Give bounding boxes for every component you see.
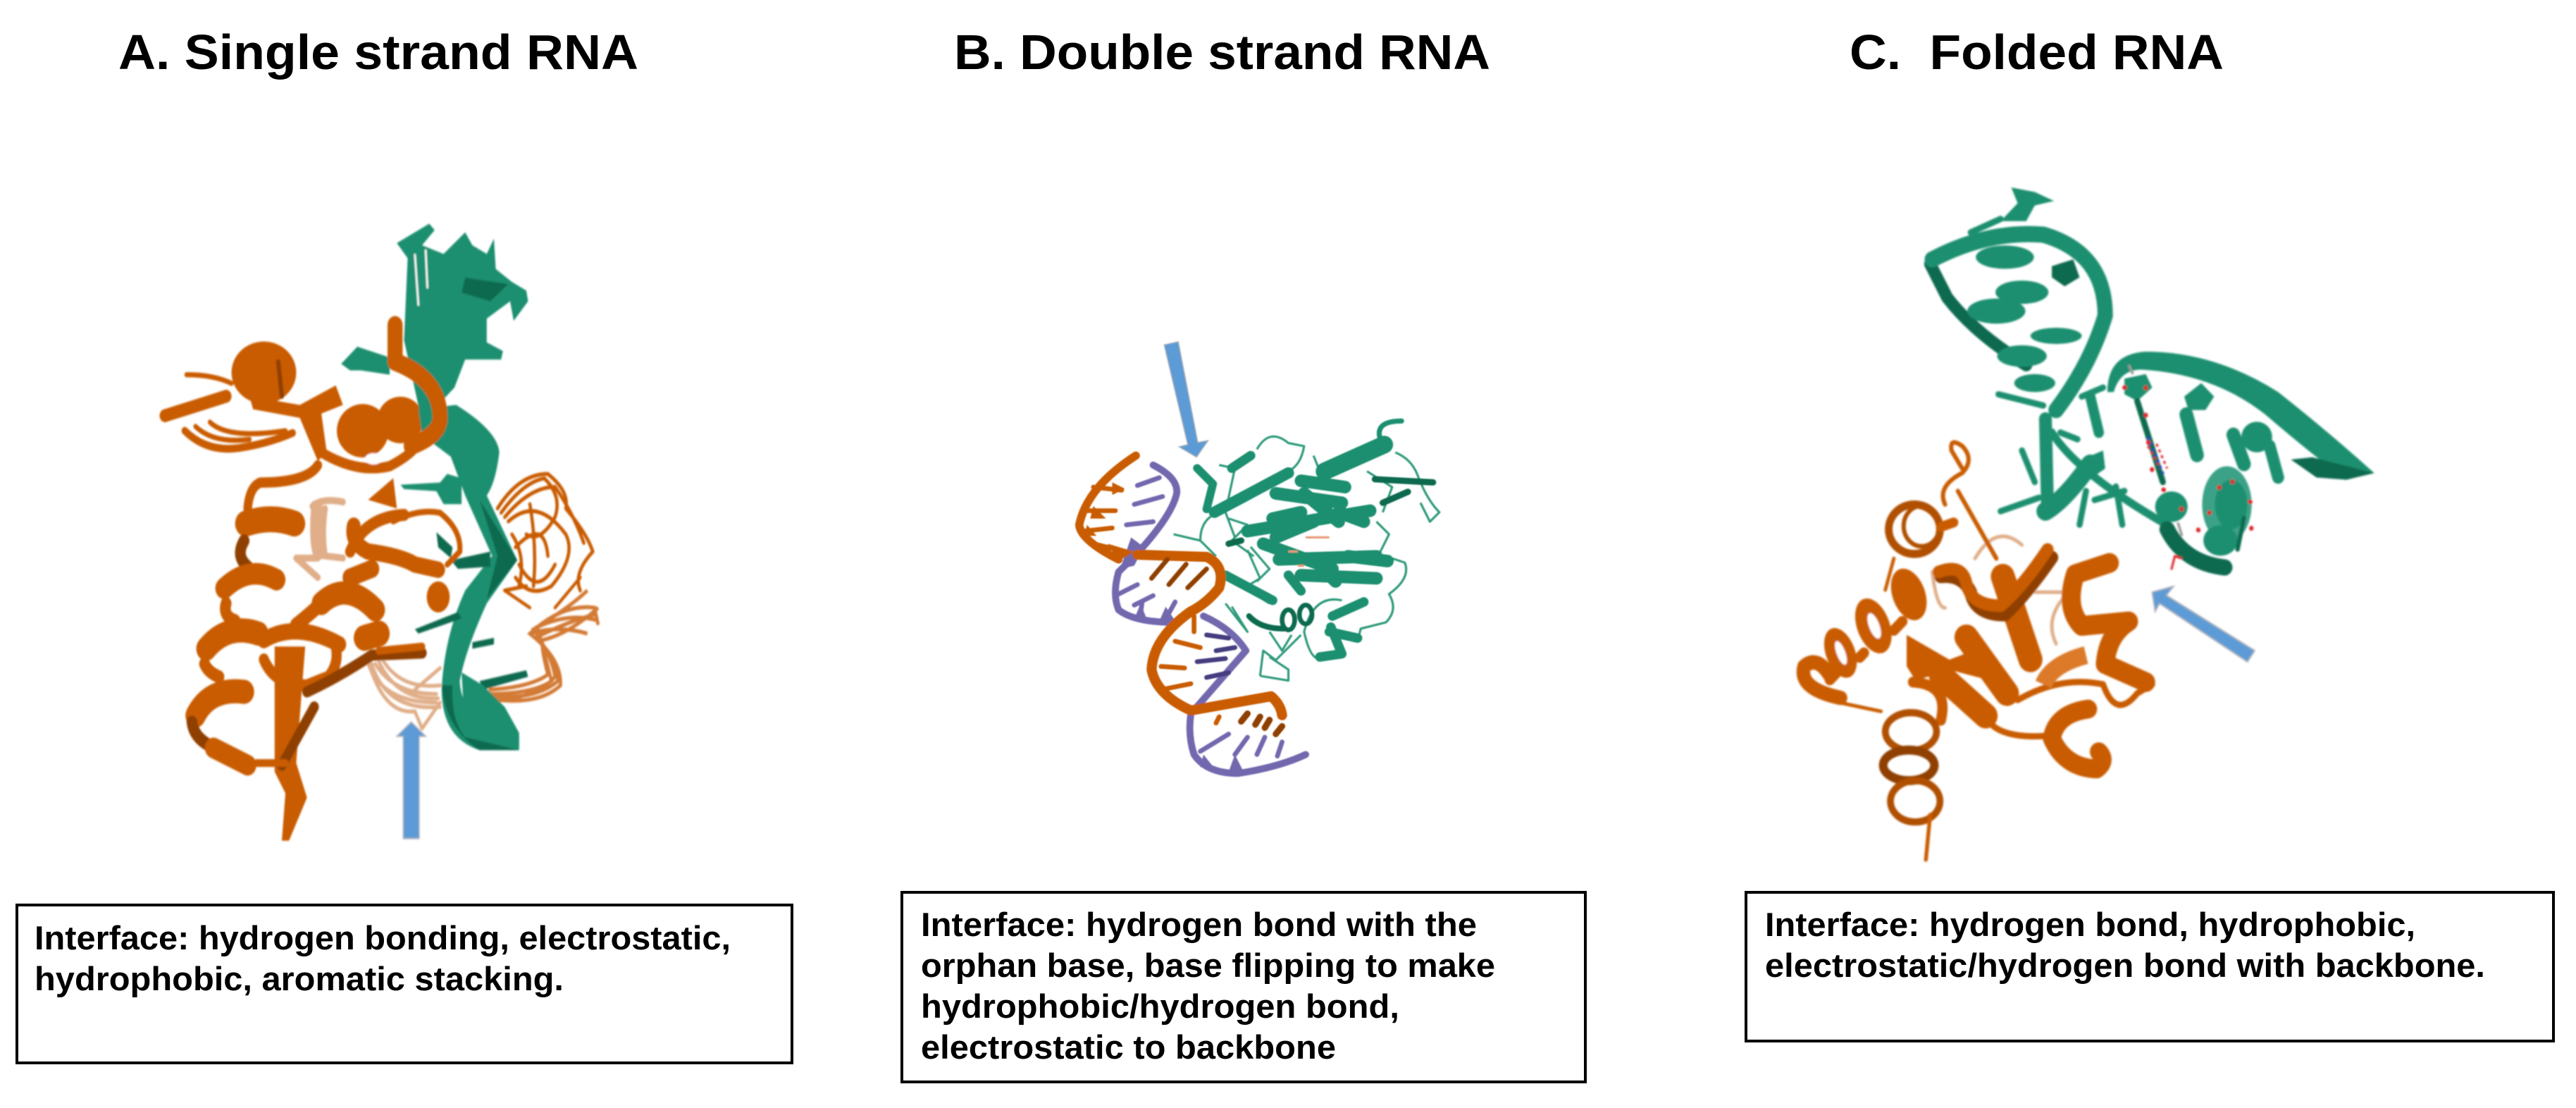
line 3: hydrophobic/hydrogen bond, — [921, 987, 1399, 1025]
title: C. Folded RNA: C. Folded RNA — [1850, 25, 2224, 80]
panel: double strand RNA structure — [1079, 342, 1439, 773]
protein: thin loops — [1174, 436, 1439, 681]
protein: light loops — [296, 500, 440, 729]
line 2: hydrophobic, aromatic stacking. — [35, 960, 564, 997]
line 2: electrostatic/hydrogen bond with backbone. — [1765, 947, 2485, 984]
line 2: orphan base, base flipping to make — [921, 947, 1495, 984]
rna: green single strand — [341, 223, 528, 750]
title: A. Single strand RNA: A. Single strand RNA — [118, 25, 638, 80]
rna: purple strand — [1115, 465, 1306, 773]
text box: folded RNA interface — [1746, 892, 2553, 1041]
line 1: Interface: hydrogen bond, hydrophobic, — [1765, 906, 2415, 943]
panel: folded RNA structure — [1803, 187, 2374, 860]
rna: green folded strand — [1930, 187, 2374, 570]
text box: single strand interface — [17, 905, 792, 1063]
text box: double strand interface — [902, 892, 1585, 1082]
arrow: up left — [2152, 586, 2255, 662]
protein: orange ribbons — [1803, 443, 2152, 860]
protein: lower helix — [192, 465, 422, 841]
rna: orange strand — [1079, 455, 1282, 734]
arrow: down right — [1164, 342, 1208, 457]
protein: green helices and sheets — [1197, 421, 1433, 657]
panel: single strand RNA structure — [165, 223, 598, 841]
title: B. Double strand RNA: B. Double strand RNA — [954, 25, 1490, 80]
protein: strand and loops over rna — [350, 325, 460, 613]
line 1: Interface: hydrogen bond with the — [921, 906, 1477, 943]
protein: right flexible loops — [487, 474, 598, 702]
line 1: Interface: hydrogen bonding, electrostatic, — [35, 919, 731, 956]
line 4: electrostatic to backbone — [921, 1028, 1336, 1066]
protein: upper helix — [165, 341, 423, 468]
arrow: up — [397, 722, 426, 839]
